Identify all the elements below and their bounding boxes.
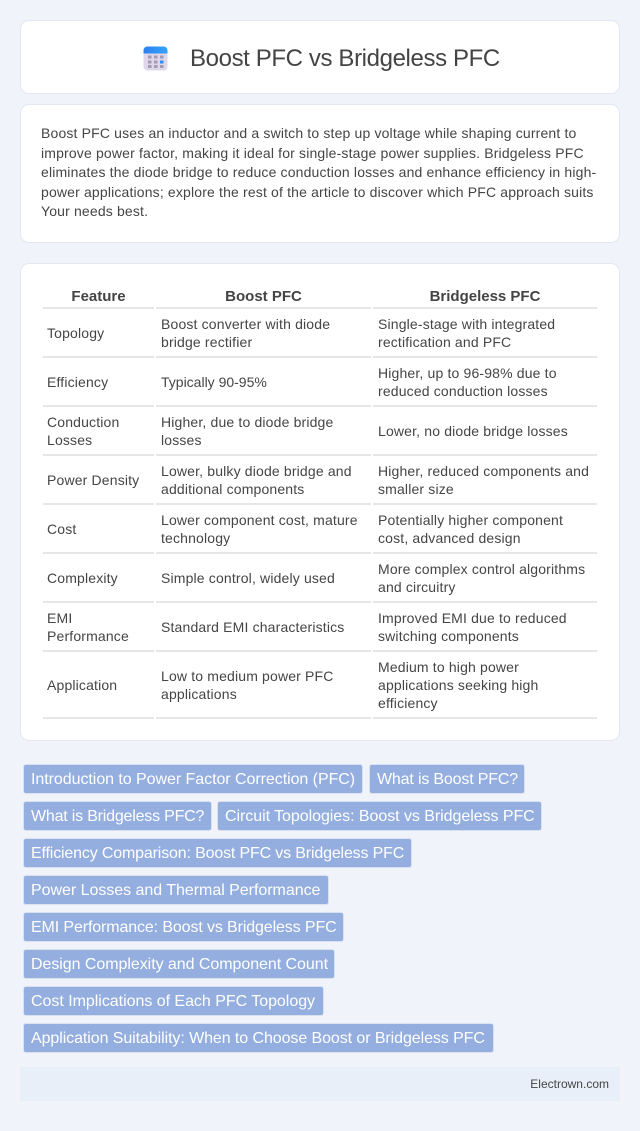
row: conduction losses: Conduction	[47, 414, 119, 430]
tag	[23, 986, 324, 1016]
icon: calendar	[144, 46, 168, 70]
row: cost: Potentially higher component	[378, 512, 563, 528]
row: power density: Higher, reduced components and	[378, 463, 589, 479]
row: emi performance	[47, 610, 567, 644]
row: topology: Single-stage with integrated	[378, 316, 555, 332]
row: power density: smaller size	[378, 481, 454, 497]
row: application: Application	[47, 677, 117, 693]
tag	[23, 875, 329, 905]
intro text: eliminates the diode bridge to reduce conduction losses and enhance efficiency in high-	[41, 164, 596, 180]
header: bridgeless pfc: Bridgeless PFC	[430, 288, 540, 305]
row: complexity	[47, 561, 585, 595]
row: complexity: Complexity	[47, 570, 118, 586]
row: efficiency: Efficiency	[47, 374, 108, 390]
header card	[20, 20, 620, 94]
row: emi performance: Standard EMI characteristics	[161, 619, 344, 635]
row: application	[47, 659, 538, 711]
row: power density: additional components	[161, 481, 304, 497]
row: topology: Boost converter with diode	[161, 316, 330, 332]
tag: Introduction to Power Factor Correction (PFC)	[31, 771, 355, 788]
row: emi performance: EMI	[47, 610, 72, 626]
comparison table card	[20, 263, 620, 741]
row: cost: cost, advanced design	[378, 530, 521, 546]
row: cost	[47, 512, 563, 546]
header: feature: Feature	[71, 288, 126, 305]
row: cost: technology	[161, 530, 230, 546]
tag: Circuit Topologies: Boost vs Bridgeless PFC	[225, 808, 535, 825]
row: emi performance: switching components	[378, 628, 519, 644]
tag	[23, 801, 212, 831]
row: topology: Topology	[47, 325, 104, 341]
row: efficiency	[47, 365, 557, 399]
footer credit: Electrown.com	[530, 1077, 609, 1091]
intro text: improve power factor, making it ideal for single-stage power supplies. Bridgeless PFC	[41, 145, 584, 161]
intro text: Your needs best.	[41, 203, 148, 219]
comparison table card: Medium to high power	[378, 659, 519, 675]
tag	[23, 949, 335, 979]
row: complexity: More complex control algorithms	[378, 561, 585, 577]
row: conduction losses: losses	[161, 432, 202, 448]
row: cost: Cost	[47, 521, 76, 537]
row: cost: Lower component cost, mature	[161, 512, 358, 528]
row: complexity: Simple control, widely used	[161, 570, 335, 586]
row: conduction losses: Lower, no diode bridge losses	[378, 423, 568, 439]
intro text: Boost PFC uses an inductor and a switch to step up voltage while shaping current to	[41, 125, 576, 141]
tag	[23, 1023, 494, 1053]
row: power density	[47, 463, 589, 497]
row: efficiency: reduced conduction losses	[378, 383, 548, 399]
row: application: Low to medium power PFC	[161, 668, 334, 684]
tag: What is Bridgeless PFC?	[31, 808, 204, 825]
tag: EMI Performance: Boost vs Bridgeless PFC	[31, 919, 337, 936]
row: application: applications	[161, 686, 237, 702]
row: emi performance: Performance	[47, 628, 129, 644]
row: emi performance: Improved EMI due to reduced	[378, 610, 567, 626]
tag	[217, 801, 542, 831]
row: complexity: and circuitry	[378, 579, 456, 595]
row: efficiency: Typically 90-95%	[161, 374, 267, 390]
row: conduction losses: Higher, due to diode bridge	[161, 414, 333, 430]
row: application: efficiency	[378, 695, 438, 711]
tag	[369, 764, 525, 794]
intro text	[41, 125, 596, 219]
row: topology: bridge rectifier	[161, 334, 252, 350]
title: Boost PFC vs Bridgeless PFC	[190, 45, 500, 72]
tag	[23, 838, 412, 868]
tag: Cost Implications of Each PFC Topology	[31, 993, 315, 1010]
topic tags	[23, 764, 542, 1053]
tag: What is Boost PFC?	[377, 771, 518, 788]
row: conduction losses	[47, 414, 568, 448]
tag	[23, 764, 363, 794]
tag: Application Suitability: When to Choose Boost or Bridgeless PFC	[31, 1030, 485, 1047]
row: power density: Lower, bulky diode bridge and	[161, 463, 352, 479]
tag: Design Complexity and Component Count	[31, 956, 328, 973]
header: boost pfc: Boost PFC	[225, 288, 302, 305]
row: application: applications seeking high	[378, 677, 538, 693]
tag: Efficiency Comparison: Boost PFC vs Bridgeless PFC	[31, 845, 404, 862]
intro text: power applications; explore the rest of the article to discover which PFC approach suits	[41, 184, 594, 200]
footer	[20, 1067, 620, 1101]
tag	[23, 912, 344, 942]
intro card	[20, 104, 620, 243]
row: topology	[47, 316, 555, 350]
row: power density: Power Density	[47, 472, 139, 488]
row: conduction losses: Losses	[47, 432, 92, 448]
row: efficiency: Higher, up to 96-98% due to	[378, 365, 557, 381]
tag: Power Losses and Thermal Performance	[31, 882, 320, 899]
row: topology: rectification and PFC	[378, 334, 511, 350]
